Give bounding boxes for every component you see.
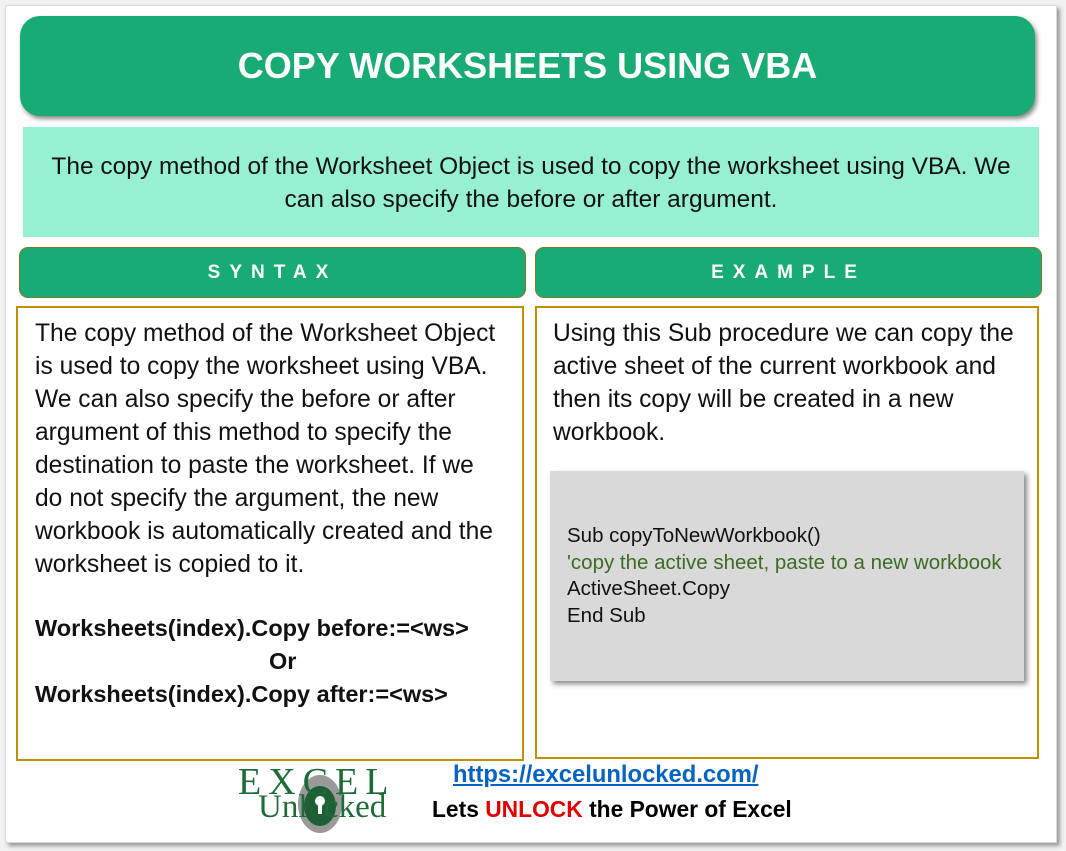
syntax text: worksheet is copied to it. <box>35 551 304 578</box>
title: COPY WORKSHEETS USING VBA <box>238 45 817 86</box>
url: https://excelunlocked.com/ <box>453 761 758 788</box>
code box: Sub copyToNewWorkbook() <box>567 524 821 547</box>
heading: syntax: SYNTAX <box>208 262 337 282</box>
syntax text: workbook is automatically created and the <box>35 518 493 545</box>
code box: 'copy the active sheet, paste to a new workbook <box>567 550 1002 574</box>
code box: ActiveSheet.Copy <box>567 577 730 600</box>
logo: EXCEL <box>238 761 395 803</box>
description box <box>23 127 1039 237</box>
syntax text <box>35 320 496 578</box>
example text <box>553 320 1014 446</box>
syntax text: destination to paste the worksheet. If we <box>35 452 474 479</box>
code box: End Sub <box>567 604 646 626</box>
panel: example <box>535 306 1039 759</box>
heading: syntax <box>19 247 526 298</box>
logo <box>238 761 395 833</box>
syntax text: argument of this method to specify the <box>35 419 452 446</box>
description box: The copy method of the Worksheet Object is used to copy the worksheet using VBA. We <box>51 153 1011 180</box>
syntax code: Worksheets(index).Copy after:=<ws> <box>35 681 448 707</box>
syntax text: do not specify the argument, the new <box>35 485 438 512</box>
example text: Using this Sub procedure we can copy the <box>553 320 1014 347</box>
logo: Unlocked <box>258 789 386 825</box>
heading: example <box>535 247 1042 298</box>
syntax text: We can also specify the before or after <box>35 386 456 413</box>
syntax code: Or <box>269 648 296 674</box>
heading: example: EXAMPLE <box>711 262 866 282</box>
syntax text: The copy method of the Worksheet Object <box>35 320 495 347</box>
tagline: Lets UNLOCK the Power of Excel <box>432 796 792 822</box>
panel: syntax <box>16 306 524 761</box>
syntax text: is used to copy the worksheet using VBA. <box>35 353 488 380</box>
example text: active sheet of the current workbook and <box>553 353 996 380</box>
code box <box>550 471 1024 681</box>
title <box>20 16 1035 116</box>
example text: workbook. <box>553 419 665 446</box>
syntax code: Worksheets(index).Copy before:=<ws> <box>35 615 469 641</box>
syntax code <box>35 615 469 707</box>
description box: can also specify the before or after argument. <box>284 186 778 213</box>
example text: then its copy will be created in a new <box>553 386 954 413</box>
